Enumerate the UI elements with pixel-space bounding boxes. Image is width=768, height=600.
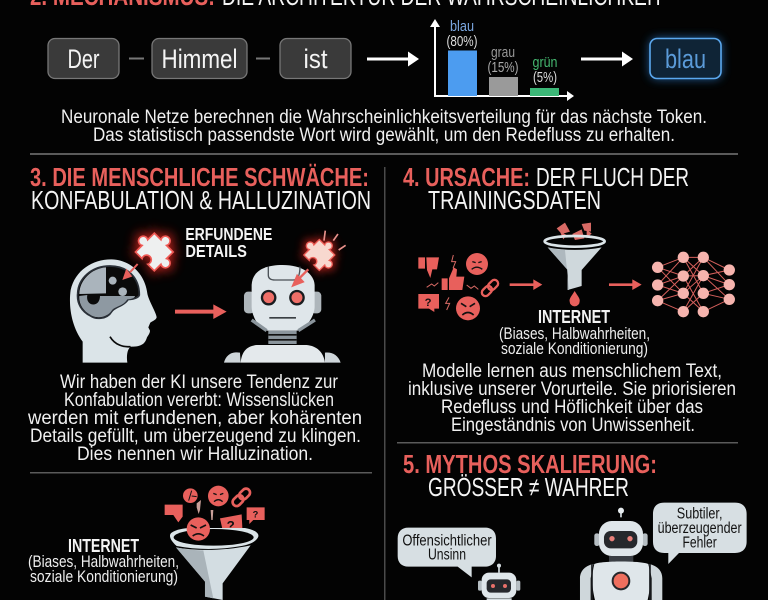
- arrow: human to robot: [175, 304, 227, 319]
- arrow: tokens to chart: [367, 52, 419, 66]
- icon: funnel with internet debris: ?: [253, 510, 259, 520]
- token sequence: Himmel: [162, 44, 238, 74]
- label: internet, section 4: soziale Konditionierung): [501, 339, 648, 358]
- bar chart: probabilities: grün: [532, 54, 558, 71]
- icon: funnel with internet debris: [165, 486, 265, 600]
- text: section 2 explanation: [61, 107, 707, 146]
- bar chart: probabilities: grau: [491, 44, 515, 61]
- label: erfundene details: ERFUNDENE: [185, 224, 272, 244]
- token sequence: [48, 38, 351, 78]
- text: section 4 explanation: [408, 361, 736, 436]
- bar chart: probabilities: blau: [450, 18, 474, 35]
- heading: section 4: 4. URSACHE:: [403, 162, 530, 192]
- label: internet, section 3: [28, 536, 179, 586]
- speech bubble: small robot: [398, 528, 496, 577]
- text: section 4 explanation: Redefluss und Höflichkeit über das: [441, 397, 703, 418]
- text: section 2 explanation: Das statistisch passendste Wort wird gewählt, um den Redefluss zu erhalten.: [93, 125, 675, 146]
- bar chart: probabilities: (15%): [488, 59, 519, 76]
- speech bubble: small robot: Offensichtlicher: [402, 533, 492, 550]
- speech bubble: large robot: Fehler: [682, 534, 717, 551]
- icon: glowing puzzle piece, human: [126, 217, 189, 281]
- icon: neural network: [652, 252, 735, 317]
- text: section 3 explanation: Details gefüllt, um überzeugend zu klingen.: [30, 426, 361, 447]
- label: internet, section 3: soziale Konditionierung): [30, 567, 178, 586]
- text: section 3 explanation: Wir haben der KI unsere Tendenz zur: [60, 372, 339, 393]
- heading: section 3: [30, 162, 371, 215]
- arrow: chart to result: [581, 52, 633, 66]
- bar chart: probabilities: (80%): [446, 33, 478, 50]
- heading: section 3: 3. DIE MENSCHLICHE SCHWÄCHE:: [30, 162, 369, 192]
- speech bubble: large robot: [653, 503, 747, 564]
- text: section 4 explanation: Modelle lernen aus menschlichem Text,: [422, 361, 722, 382]
- icon: robot: [224, 265, 341, 363]
- text: section 4 explanation: Eingeständnis von Unwissenheit.: [451, 415, 695, 436]
- arrow: content to funnel: [510, 279, 542, 290]
- icon: human head: [70, 259, 157, 363]
- label: internet, section 4: [499, 307, 650, 358]
- speech bubble: large robot: überzeugender: [658, 520, 742, 537]
- text: section 3 explanation: Dies nennen wir Halluzination.: [77, 444, 313, 465]
- speech bubble: large robot: Subtiler,: [677, 505, 722, 522]
- result token: blau: [650, 38, 721, 78]
- text: section 4 explanation: inklusive unserer Vorurteile. Sie priorisieren: [408, 379, 736, 400]
- illustration: small vs large robot: [398, 503, 747, 600]
- icon: funnel: [545, 223, 605, 306]
- icon: funnel with internet debris: ?: [227, 518, 235, 533]
- heading: section 4: DER FLUCH DER: [536, 162, 689, 192]
- label: internet, section 3: INTERNET: [68, 536, 139, 556]
- icons: biased internet content: [418, 253, 500, 320]
- heading: section 5: GRÖSSER ≠ WAHRER: [428, 472, 629, 502]
- speech bubble: small robot: Unsinn: [428, 547, 466, 564]
- text: section 3 explanation: [27, 372, 362, 465]
- label: internet, section 4: (Biases, Halbwahrheiten,: [499, 324, 650, 343]
- icons: biased internet content: ?: [425, 297, 432, 309]
- text: section 2 explanation: Neuronale Netze berechnen die Wahrscheinlichkeitsverteilung für das nächste Token.: [61, 107, 707, 128]
- label: erfundene details: DETAILS: [185, 241, 247, 261]
- icon: small robot: [478, 564, 520, 600]
- token sequence: ist: [304, 44, 328, 74]
- icon: glowing puzzle piece, robot: [296, 227, 348, 278]
- arrow: funnel to network: [609, 279, 642, 290]
- bar chart: probabilities: [430, 18, 574, 101]
- illustration: human to robot confabulation: [70, 217, 348, 363]
- label: internet, section 3: (Biases, Halbwahrheiten,: [28, 552, 179, 571]
- heading: section 4: [403, 162, 689, 215]
- token sequence: Der: [68, 44, 100, 74]
- illustration: training data filter: [418, 223, 735, 320]
- heading: section 3: KONFABULATION & HALLUZINATION: [31, 185, 371, 215]
- bar chart: probabilities: (5%): [533, 69, 557, 86]
- label: internet, section 4: INTERNET: [538, 307, 610, 327]
- arrow: puzzle piece into head: [124, 264, 138, 278]
- heading: section 4: TRAININGSDATEN: [428, 185, 601, 215]
- text: section 3 explanation: Konfabulation vererbt: Wissenslücken: [64, 390, 334, 411]
- result token: blau: blau: [665, 44, 706, 74]
- icon: large robot: [580, 508, 662, 600]
- arrow: puzzle piece into robot: [293, 269, 308, 285]
- heading: section 5: [403, 449, 657, 502]
- heading: section 2: [30, 0, 664, 11]
- label: erfundene details: [185, 224, 272, 261]
- text: section 3 explanation: werden mit erfundenen, aber kohärenten: [27, 408, 362, 429]
- heading: section 5: 5. MYTHOS SKALIERUNG:: [403, 449, 657, 479]
